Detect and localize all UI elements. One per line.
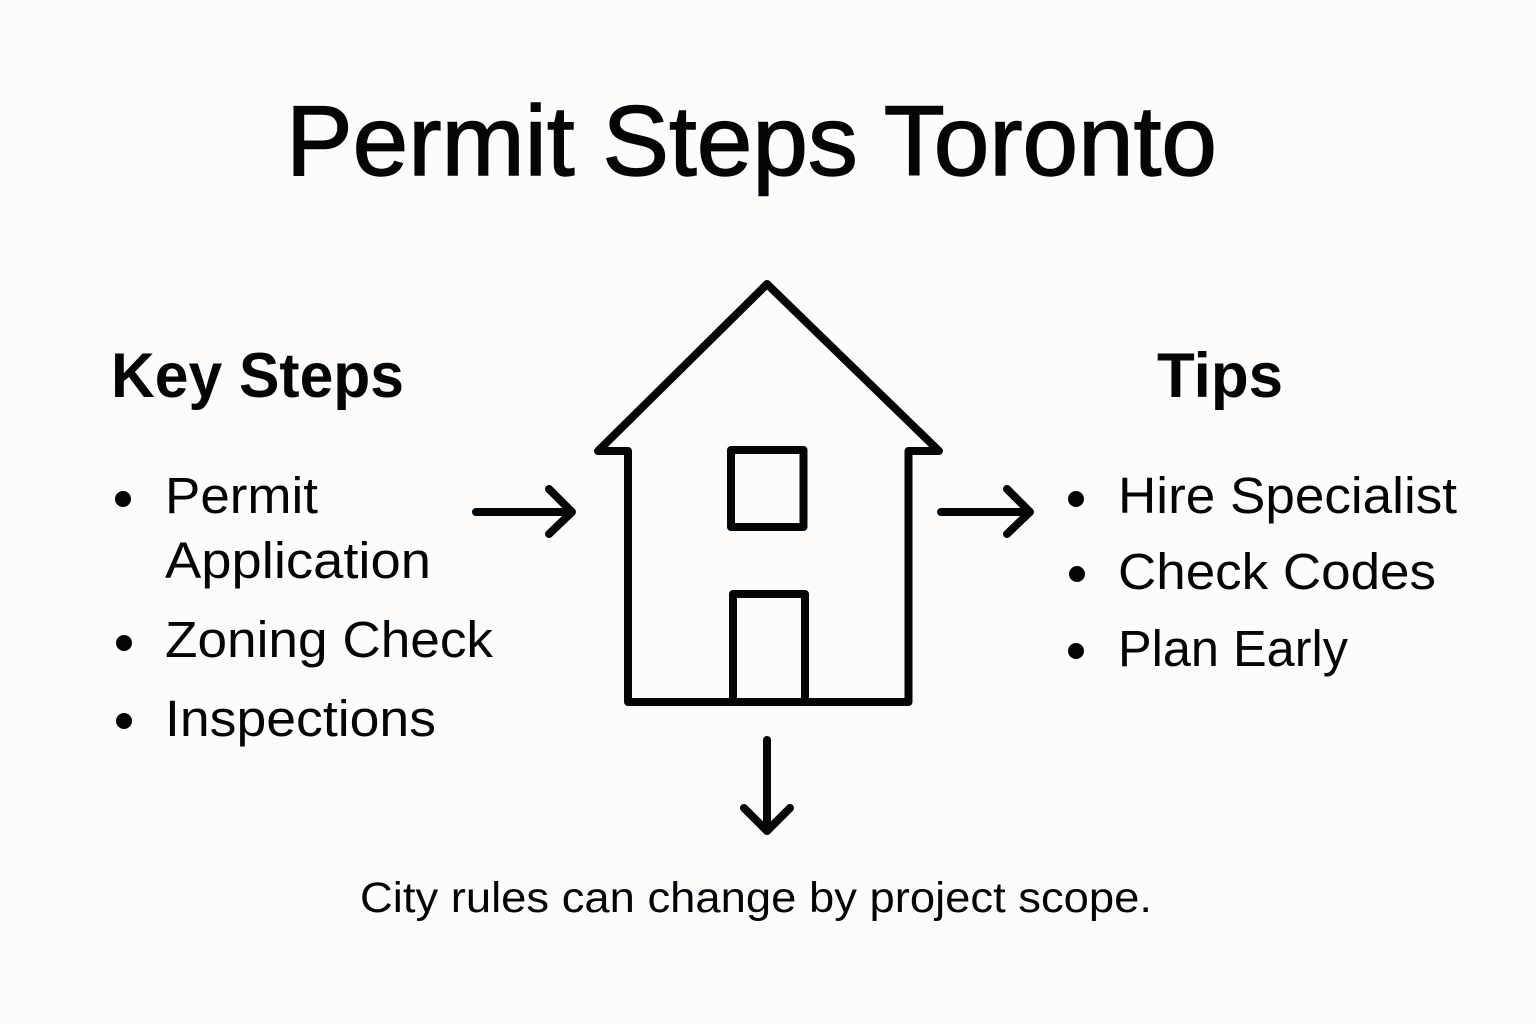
list item: permit application: Application bbox=[165, 532, 431, 589]
footer note: City rules can change by project scope. bbox=[360, 874, 1152, 922]
heading: key steps: Key Steps bbox=[111, 341, 404, 411]
house door bbox=[733, 594, 805, 702]
list item: permit application bbox=[115, 467, 431, 589]
arrow: house to tips bbox=[941, 489, 1030, 534]
list item: hire specialist: Hire Specialist bbox=[1118, 467, 1457, 524]
arrow: house to note bbox=[744, 740, 790, 831]
heading: tips: Tips bbox=[1157, 341, 1283, 411]
icon: house bbox=[598, 284, 939, 702]
list item: inspections: Inspections bbox=[165, 690, 436, 747]
title: Permit Steps Toronto bbox=[286, 85, 1217, 196]
panel: tips bbox=[1068, 341, 1457, 677]
list item: zoning check: Zoning Check bbox=[165, 611, 494, 668]
list item: check codes: Check Codes bbox=[1118, 543, 1436, 600]
arrow: key steps to house bbox=[476, 489, 572, 534]
list item: permit application: Permit bbox=[165, 467, 318, 524]
house window bbox=[731, 450, 804, 527]
panel: key steps bbox=[111, 341, 494, 747]
house outline bbox=[598, 284, 939, 702]
list item: plan early: Plan Early bbox=[1118, 620, 1348, 677]
